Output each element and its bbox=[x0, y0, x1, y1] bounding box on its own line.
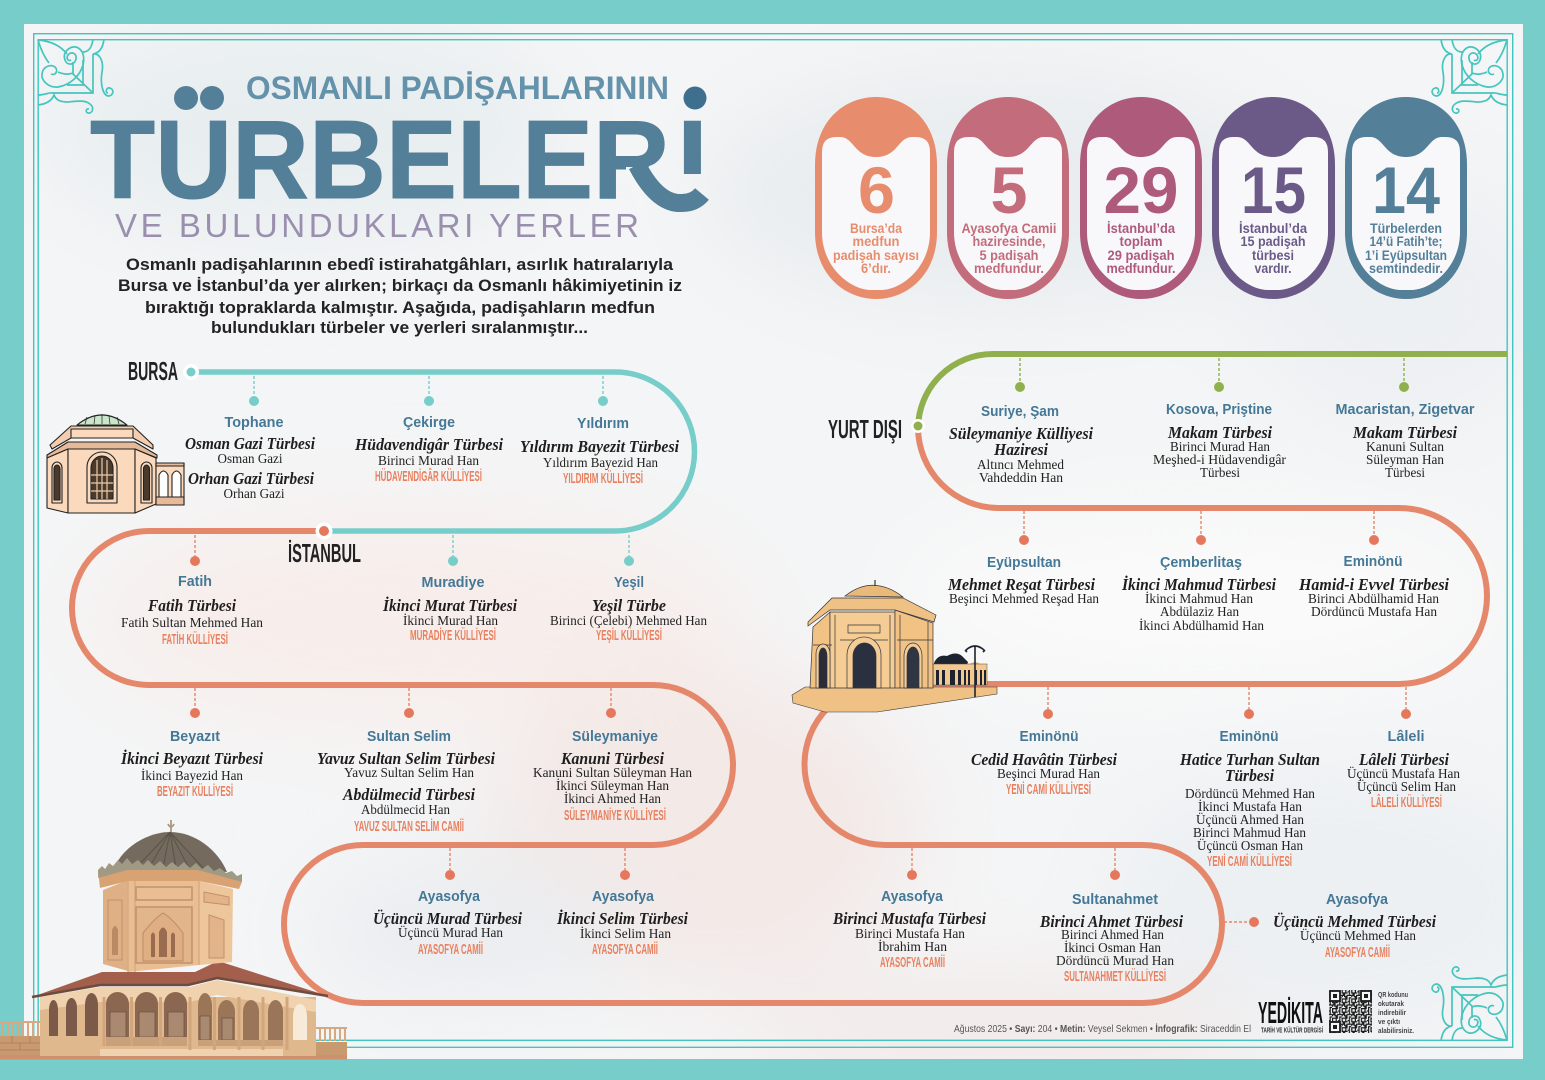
QR caption: QR kodunu bbox=[1378, 990, 1408, 999]
magazine logo: Yedikıta bbox=[1258, 995, 1323, 1034]
badge: 15: 15 padişah bbox=[1240, 234, 1306, 249]
entry: Eminönü, Hatice Turhan Sultan: Dördüncü Mehmed Han bbox=[1185, 787, 1315, 802]
entry: Ayasofya, Üçüncü Mehmed: AYASOFYA CAMİİ bbox=[1325, 944, 1390, 961]
illustration: Istanbul tomb with arcade bbox=[0, 820, 347, 1060]
entry: Beyazıt: Beyazıt bbox=[170, 729, 220, 745]
badge: 15: vardır. bbox=[1254, 261, 1292, 276]
entry: Eyüpsultan: Mehmet Reşat Türbesi bbox=[947, 575, 1095, 594]
entry: Fatih: Fatih Sultan Mehmed Han bbox=[121, 616, 263, 631]
entry: Muradiye: İkinci Murad Han bbox=[403, 613, 498, 629]
entry: Eminönü, Hatice Turhan Sultan: Üçüncü Osman Han bbox=[1197, 837, 1303, 854]
entry: Suriye, Şam: Altıncı Mehmed bbox=[977, 458, 1064, 473]
entry: Kosova, Priştine: Meşhed-i Hüdavendigâr bbox=[1153, 453, 1286, 468]
arcade bbox=[40, 980, 316, 1056]
entry: Ayasofya, Birinci Mustafa: Birinci Mustafa Türbesi bbox=[832, 909, 986, 928]
entry: Eminönü, Hatice Turhan Sultan: Türbesi bbox=[1225, 766, 1274, 785]
entry: Macaristan, Zigetvar bbox=[1336, 402, 1475, 481]
entry: Lâleli: LÂLELİ KÜLLİYESİ bbox=[1371, 793, 1442, 811]
entry: Suriye, Şam: Haziresi bbox=[993, 440, 1048, 459]
entry: Çemberlitaş: Çemberlitaş bbox=[1160, 555, 1242, 571]
illustration: Mehmed Reşad tomb bbox=[792, 580, 997, 712]
badge: 6 bbox=[815, 97, 937, 299]
entry: Lâleli: Lâleli bbox=[1388, 729, 1424, 745]
entry: Ayasofya, Üçüncü Murad: Üçüncü Murad Türbesi bbox=[373, 909, 522, 928]
entry: Lâleli: Üçüncü Selim Han bbox=[1357, 778, 1456, 795]
entry: Çekirge: HÜDAVENDİGÂR KÜLLİYESİ bbox=[375, 467, 482, 485]
entry: Ayasofya, İkinci Selim: AYASOFYA CAMİİ bbox=[592, 941, 658, 958]
entry: Eyüpsultan bbox=[947, 555, 1099, 607]
intro paragraph: Bursa ve İstanbul’da yer alırken; birkaçı da Osmanlı hâkimiyetinin iz bbox=[118, 276, 682, 295]
entry: Sultanahmet bbox=[1039, 892, 1183, 985]
entry: Macaristan, Zigetvar: Türbesi bbox=[1385, 466, 1425, 481]
entry: Süleymaniye: İkinci Süleyman Han bbox=[556, 778, 669, 794]
entry: Eminönü, Cedid Havâtin: Beşinci Murad Han bbox=[997, 767, 1100, 782]
entry: Ayasofya, İkinci Selim bbox=[556, 889, 688, 958]
entry: Sultanahmet: İkinci Osman Han bbox=[1064, 940, 1161, 956]
entry: Çekirge: Çekirge bbox=[403, 415, 455, 431]
entry: Eminönü, Hamid-i Evvel bbox=[1298, 554, 1449, 620]
entry: Kosova, Priştine: Türbesi bbox=[1200, 466, 1240, 481]
entry: Süleymaniye: Kanuni Sultan Süleyman Han bbox=[533, 766, 692, 781]
entry: Sultan Selim: YAVUZ SULTAN SELİM CAMİİ bbox=[354, 818, 464, 835]
subtitle: VE BULUNDUKLARI YERLER bbox=[115, 207, 639, 244]
entry: Çekirge: Hüdavendigâr Türbesi bbox=[354, 435, 503, 454]
entry: Tophane: Orhan Gazi Türbesi bbox=[188, 469, 314, 488]
entry: Eminönü, Cedid Havâtin: YENİ CAMİ KÜLLİYESİ bbox=[1006, 781, 1091, 798]
ornament: bottom right corner bbox=[1432, 967, 1507, 1041]
entry: Yıldırım: Yıldırım bbox=[577, 416, 629, 432]
entry: Eminönü, Hatice Turhan Sultan bbox=[1179, 729, 1320, 870]
entry: Ayasofya, İkinci Selim: İkinci Selim Han bbox=[580, 926, 671, 942]
entry: Süleymaniye: Kanuni Türbesi bbox=[560, 749, 664, 768]
entry: Kosova, Priştine: Kosova, Priştine bbox=[1166, 402, 1272, 418]
entry: Sultanahmet: Birinci Ahmet Türbesi bbox=[1039, 912, 1183, 931]
base walls bbox=[0, 1021, 347, 1060]
entry: Süleymaniye: İkinci Ahmed Han bbox=[564, 791, 661, 807]
entry: Yeşil: Birinci (Çelebi) Mehmed Han bbox=[550, 614, 707, 629]
stat badges bbox=[815, 97, 1467, 299]
entry: Ayasofya, Üçüncü Mehmed: Üçüncü Mehmed Han bbox=[1300, 927, 1416, 944]
entry: Eminönü, Hatice Turhan Sultan: Eminönü bbox=[1220, 729, 1278, 745]
entry: Eminönü, Hamid-i Evvel: Hamid-i Evvel Türbesi bbox=[1298, 575, 1449, 594]
badge: 29: 29 bbox=[1104, 153, 1178, 227]
entry: Çekirge bbox=[354, 415, 503, 485]
route line: green abroad bbox=[918, 354, 1507, 428]
credits line: Ağustos 2025 • Sayı: 204 • Metin: Veysel Sekmen • İnfografik: Siraceddin El bbox=[954, 1022, 1251, 1035]
route line: teal Bursa bbox=[191, 372, 694, 531]
entry: Fatih: Fatih bbox=[178, 574, 212, 590]
entry: Fatih: FATİH KÜLLİYESİ bbox=[162, 631, 228, 648]
entry: Tophane: Orhan Gazi bbox=[224, 487, 285, 502]
badge: 6: Bursa’da bbox=[850, 221, 902, 236]
badge: 5: haziresinde, bbox=[972, 234, 1046, 249]
connectors: dashed stems and dots bbox=[190, 358, 1411, 927]
entry: Eminönü, Hamid-i Evvel: Eminönü bbox=[1344, 554, 1402, 570]
roof bbox=[32, 961, 328, 997]
entry: Çekirge: Birinci Murad Han bbox=[378, 454, 479, 469]
entry: Ayasofya, Birinci Mustafa: Ayasofya bbox=[881, 889, 944, 905]
entry: Eminönü, Hatice Turhan Sultan: Hatice Turhan Sultan bbox=[1179, 750, 1320, 769]
entry: Tophane: Osman Gazi Türbesi bbox=[185, 434, 315, 453]
entry: Sultan Selim: Sultan Selim bbox=[367, 729, 451, 745]
region label: Bursa: BURSA bbox=[128, 356, 178, 386]
entry: Eminönü, Hamid-i Evvel: Dördüncü Mustafa Han bbox=[1311, 605, 1437, 620]
badge: 14: 1’i Eyüpsultan bbox=[1365, 248, 1447, 263]
badge: 29 bbox=[1080, 97, 1202, 299]
badge: 29: medfundur. bbox=[1106, 261, 1176, 276]
entry: Ayasofya, Birinci Mustafa: AYASOFYA CAMİİ bbox=[880, 954, 945, 971]
entry: Çemberlitaş bbox=[1121, 555, 1276, 634]
entry: Çemberlitaş: İkinci Mahmud Han bbox=[1145, 591, 1253, 607]
badge: 14 bbox=[1345, 97, 1467, 299]
entry: Yeşil bbox=[550, 575, 707, 644]
entry: Eminönü, Cedid Havâtin: Cedid Havâtin Türbesi bbox=[971, 750, 1117, 769]
entry: Ayasofya, Birinci Mustafa: Birinci Mustafa Han bbox=[855, 927, 965, 942]
title block bbox=[90, 70, 708, 244]
entry: Ayasofya, Üçüncü Mehmed: Üçüncü Mehmed Türbesi bbox=[1273, 912, 1436, 931]
entry: Eyüpsultan: Eyüpsultan bbox=[987, 555, 1061, 571]
QR caption: okutarak bbox=[1378, 999, 1405, 1008]
entry: Suriye, Şam: Süleymaniye Külliyesi bbox=[949, 424, 1093, 443]
entry: Eminönü, Cedid Havâtin: Eminönü bbox=[1020, 729, 1078, 745]
QR caption: ve çıktı bbox=[1378, 1017, 1400, 1026]
entry: Muradiye bbox=[382, 575, 517, 644]
entry: Suriye, Şam bbox=[949, 404, 1093, 486]
badge: 5: Ayasofya Camii bbox=[962, 221, 1056, 236]
entry: Macaristan, Zigetvar: Macaristan, Zigetvar bbox=[1336, 402, 1475, 418]
badge: 6: 6 bbox=[858, 153, 895, 227]
badge: 5: 5 bbox=[990, 153, 1028, 227]
entry: Sultanahmet: Birinci Ahmed Han bbox=[1061, 928, 1164, 943]
illustration: Bursa tomb bbox=[47, 414, 184, 513]
entry: Süleymaniye bbox=[533, 729, 692, 824]
entry: Muradiye: MURADİYE KÜLLİYESİ bbox=[410, 627, 496, 644]
intro paragraph: bulundukları türbeler ve yerleri sıralanmıştır... bbox=[211, 318, 588, 337]
entry: Çemberlitaş: İkinci Mahmud Türbesi bbox=[1121, 575, 1276, 594]
badge: 5: 5 padişah bbox=[980, 248, 1038, 263]
QR caption: alabilirsiniz. bbox=[1378, 1026, 1414, 1035]
ornament: top left corner bbox=[38, 39, 113, 113]
badge: 6: medfun bbox=[852, 234, 900, 249]
entry: Ayasofya, Üçüncü Murad: Üçüncü Murad Han bbox=[398, 924, 503, 941]
entry: Sultan Selim: Yavuz Sultan Selim Han bbox=[344, 766, 474, 781]
entry: Ayasofya, Üçüncü Murad bbox=[373, 889, 522, 958]
entry: Fatih bbox=[121, 574, 263, 648]
ornament: top right corner bbox=[1432, 39, 1507, 113]
entry: Suriye, Şam: Vahdeddin Han bbox=[979, 471, 1063, 486]
region label: İstanbul: İSTANBUL bbox=[288, 538, 361, 568]
entry: Beyazıt: BEYAZIT KÜLLİYESİ bbox=[157, 783, 233, 800]
entry: Sultanahmet: SULTANAHMET KÜLLİYESİ bbox=[1064, 968, 1166, 985]
text: YEDİKITA bbox=[1258, 995, 1323, 1030]
badge: 14: 14’ü Fatih’te; bbox=[1370, 234, 1442, 249]
entry: Suriye, Şam: Suriye, Şam bbox=[981, 404, 1059, 420]
entry: Çemberlitaş: İkinci Abdülhamid Han bbox=[1139, 618, 1264, 634]
dome bbox=[98, 820, 242, 889]
entry: Muradiye: İkinci Murat Türbesi bbox=[382, 596, 517, 615]
entry: Tophane: Tophane bbox=[224, 415, 284, 431]
badge: 29: toplam bbox=[1120, 234, 1162, 249]
entry: Fatih: Fatih Türbesi bbox=[147, 596, 236, 615]
entry: Ayasofya, Üçüncü Mehmed bbox=[1273, 892, 1436, 961]
intro paragraph: bıraktığı topraklarda kalmıştır. Aşağıda, padişahların medfun bbox=[145, 298, 655, 317]
badge: 15: İstanbul’da bbox=[1239, 221, 1307, 236]
badge: 14: 14 bbox=[1372, 153, 1440, 227]
entry: Beyazıt bbox=[120, 729, 263, 800]
entry: Beyazıt: İkinci Beyazıt Türbesi bbox=[120, 749, 263, 768]
drum bbox=[103, 880, 233, 972]
entry: Yeşil: Yeşil bbox=[614, 575, 644, 591]
entry: Lâleli: Lâleli Türbesi bbox=[1358, 750, 1449, 769]
entry: Lâleli: Üçüncü Mustafa Han bbox=[1347, 765, 1460, 782]
entry: Süleymaniye: SÜLEYMANİYE KÜLLİYESİ bbox=[564, 807, 666, 824]
entry: Sultanahmet: Sultanahmet bbox=[1072, 892, 1158, 908]
title: Türbeleri: TÜRBELER bbox=[90, 98, 670, 222]
badge: 15 bbox=[1212, 97, 1335, 299]
side wing and trees bbox=[933, 654, 987, 685]
entry: Sultan Selim bbox=[317, 729, 495, 835]
region label: İstanbul bbox=[288, 522, 361, 568]
entry: Ayasofya, İkinci Selim: Ayasofya bbox=[592, 889, 655, 905]
badge: 29: 29 padişah bbox=[1108, 248, 1174, 263]
entry: Eminönü, Hatice Turhan Sultan: Üçüncü Ahmed Han bbox=[1196, 811, 1304, 828]
entry: Yeşil: YEŞİL KÜLLİYESİ bbox=[596, 627, 662, 644]
entry: Macaristan, Zigetvar: Kanuni Sultan bbox=[1366, 440, 1444, 455]
entry: Yıldırım: YILDIRIM KÜLLİYESİ bbox=[563, 470, 643, 487]
entry: Lâleli bbox=[1347, 729, 1460, 811]
entry: Yeşil: Yeşil Türbe bbox=[592, 596, 666, 615]
tomb body bbox=[808, 585, 936, 688]
entry: Eminönü, Hatice Turhan Sultan: Birinci Mahmud Han bbox=[1193, 826, 1306, 841]
entry: Yıldırım: Yıldırım Bayezid Han bbox=[543, 456, 658, 471]
QR caption: indirebilir bbox=[1378, 1008, 1406, 1017]
entry: Ayasofya, İkinci Selim: İkinci Selim Türbesi bbox=[556, 909, 688, 928]
entry: Kosova, Priştine: Makam Türbesi bbox=[1167, 423, 1272, 442]
entry: Çemberlitaş: Abdülaziz Han bbox=[1160, 605, 1239, 620]
badge: 6: 6’dır. bbox=[861, 261, 891, 276]
QR caption bbox=[1378, 990, 1414, 1035]
entry: Ayasofya, Üçüncü Murad: AYASOFYA CAMİİ bbox=[418, 941, 483, 958]
entry: Ayasofya, Üçüncü Murad: Ayasofya bbox=[418, 889, 481, 905]
entry: Sultanahmet: Dördüncü Murad Han bbox=[1056, 954, 1174, 969]
entry: Ayasofya, Birinci Mustafa: İbrahim Han bbox=[878, 939, 947, 955]
entry: Ayasofya, Üçüncü Mehmed: Ayasofya bbox=[1326, 892, 1389, 908]
badge: 5: medfundur. bbox=[974, 261, 1044, 276]
entry: Eminönü, Hatice Turhan Sultan: İkinci Mustafa Han bbox=[1198, 799, 1302, 815]
entry: Tophane: Osman Gazi bbox=[218, 452, 283, 467]
badge: 29: İstanbul’da bbox=[1107, 221, 1175, 236]
entry: Sultan Selim: Abdülmecid Türbesi bbox=[342, 785, 475, 804]
title line: Osmanlı Padişahlarının: OSMANLI PADİŞAHLARININ bbox=[246, 70, 669, 106]
entry: Macaristan, Zigetvar: Süleyman Han bbox=[1366, 453, 1444, 468]
lamp post bbox=[965, 646, 985, 697]
entry: Eyüpsultan: Beşinci Mehmed Reşad Han bbox=[949, 592, 1099, 607]
entry: Eminönü, Cedid Havâtin bbox=[971, 729, 1117, 798]
badge: 6: padişah sayısı bbox=[833, 248, 919, 263]
route line: salmon Istanbul bbox=[72, 428, 1487, 1003]
entry: Macaristan, Zigetvar: Makam Türbesi bbox=[1352, 423, 1457, 442]
badge: 14: Türbelerden bbox=[1370, 221, 1442, 236]
entry: Eminönü, Hatice Turhan Sultan: YENİ CAMİ KÜLLİYESİ bbox=[1207, 853, 1292, 870]
badge: 15: 15 bbox=[1241, 153, 1306, 227]
entry: Kosova, Priştine: Birinci Murad Han bbox=[1170, 440, 1270, 455]
entry: Muradiye: Muradiye bbox=[422, 575, 484, 591]
entry: Beyazıt: İkinci Bayezid Han bbox=[141, 768, 243, 784]
entry: Sultan Selim: Yavuz Sultan Selim Türbesi bbox=[317, 749, 495, 768]
entry: Yıldırım bbox=[520, 416, 679, 487]
entry: Yıldırım: Yıldırım Bayezit Türbesi bbox=[520, 437, 679, 456]
entry: Ayasofya, Birinci Mustafa bbox=[832, 889, 986, 971]
intro paragraph bbox=[118, 255, 682, 337]
entry: Tophane bbox=[185, 415, 315, 502]
QR code bbox=[1329, 990, 1372, 1033]
entry: Kosova, Priştine bbox=[1153, 402, 1286, 481]
magazine logo: Yedikıta: TARİH VE KÜLTÜR DERGİSİ bbox=[1261, 1026, 1323, 1034]
entry: Süleymaniye: Süleymaniye bbox=[572, 729, 658, 745]
badge: 5 bbox=[947, 97, 1069, 299]
entry: Sultan Selim: Abdülmecid Han bbox=[361, 803, 450, 818]
badge: 15: türbesi bbox=[1252, 248, 1294, 263]
badge: 14: semtindedir. bbox=[1369, 261, 1443, 276]
region label: Yurt Dışı: YURT DIŞI bbox=[828, 414, 902, 444]
intro paragraph: Osmanlı padişahlarının ebedî istirahatgâhları, asırlık hatıralarıyla bbox=[126, 255, 674, 274]
platform bbox=[792, 687, 997, 712]
title: Türbeleri: İ bbox=[677, 98, 708, 222]
entry: Eminönü, Hamid-i Evvel: Birinci Abdülhamid Han bbox=[1308, 592, 1439, 607]
